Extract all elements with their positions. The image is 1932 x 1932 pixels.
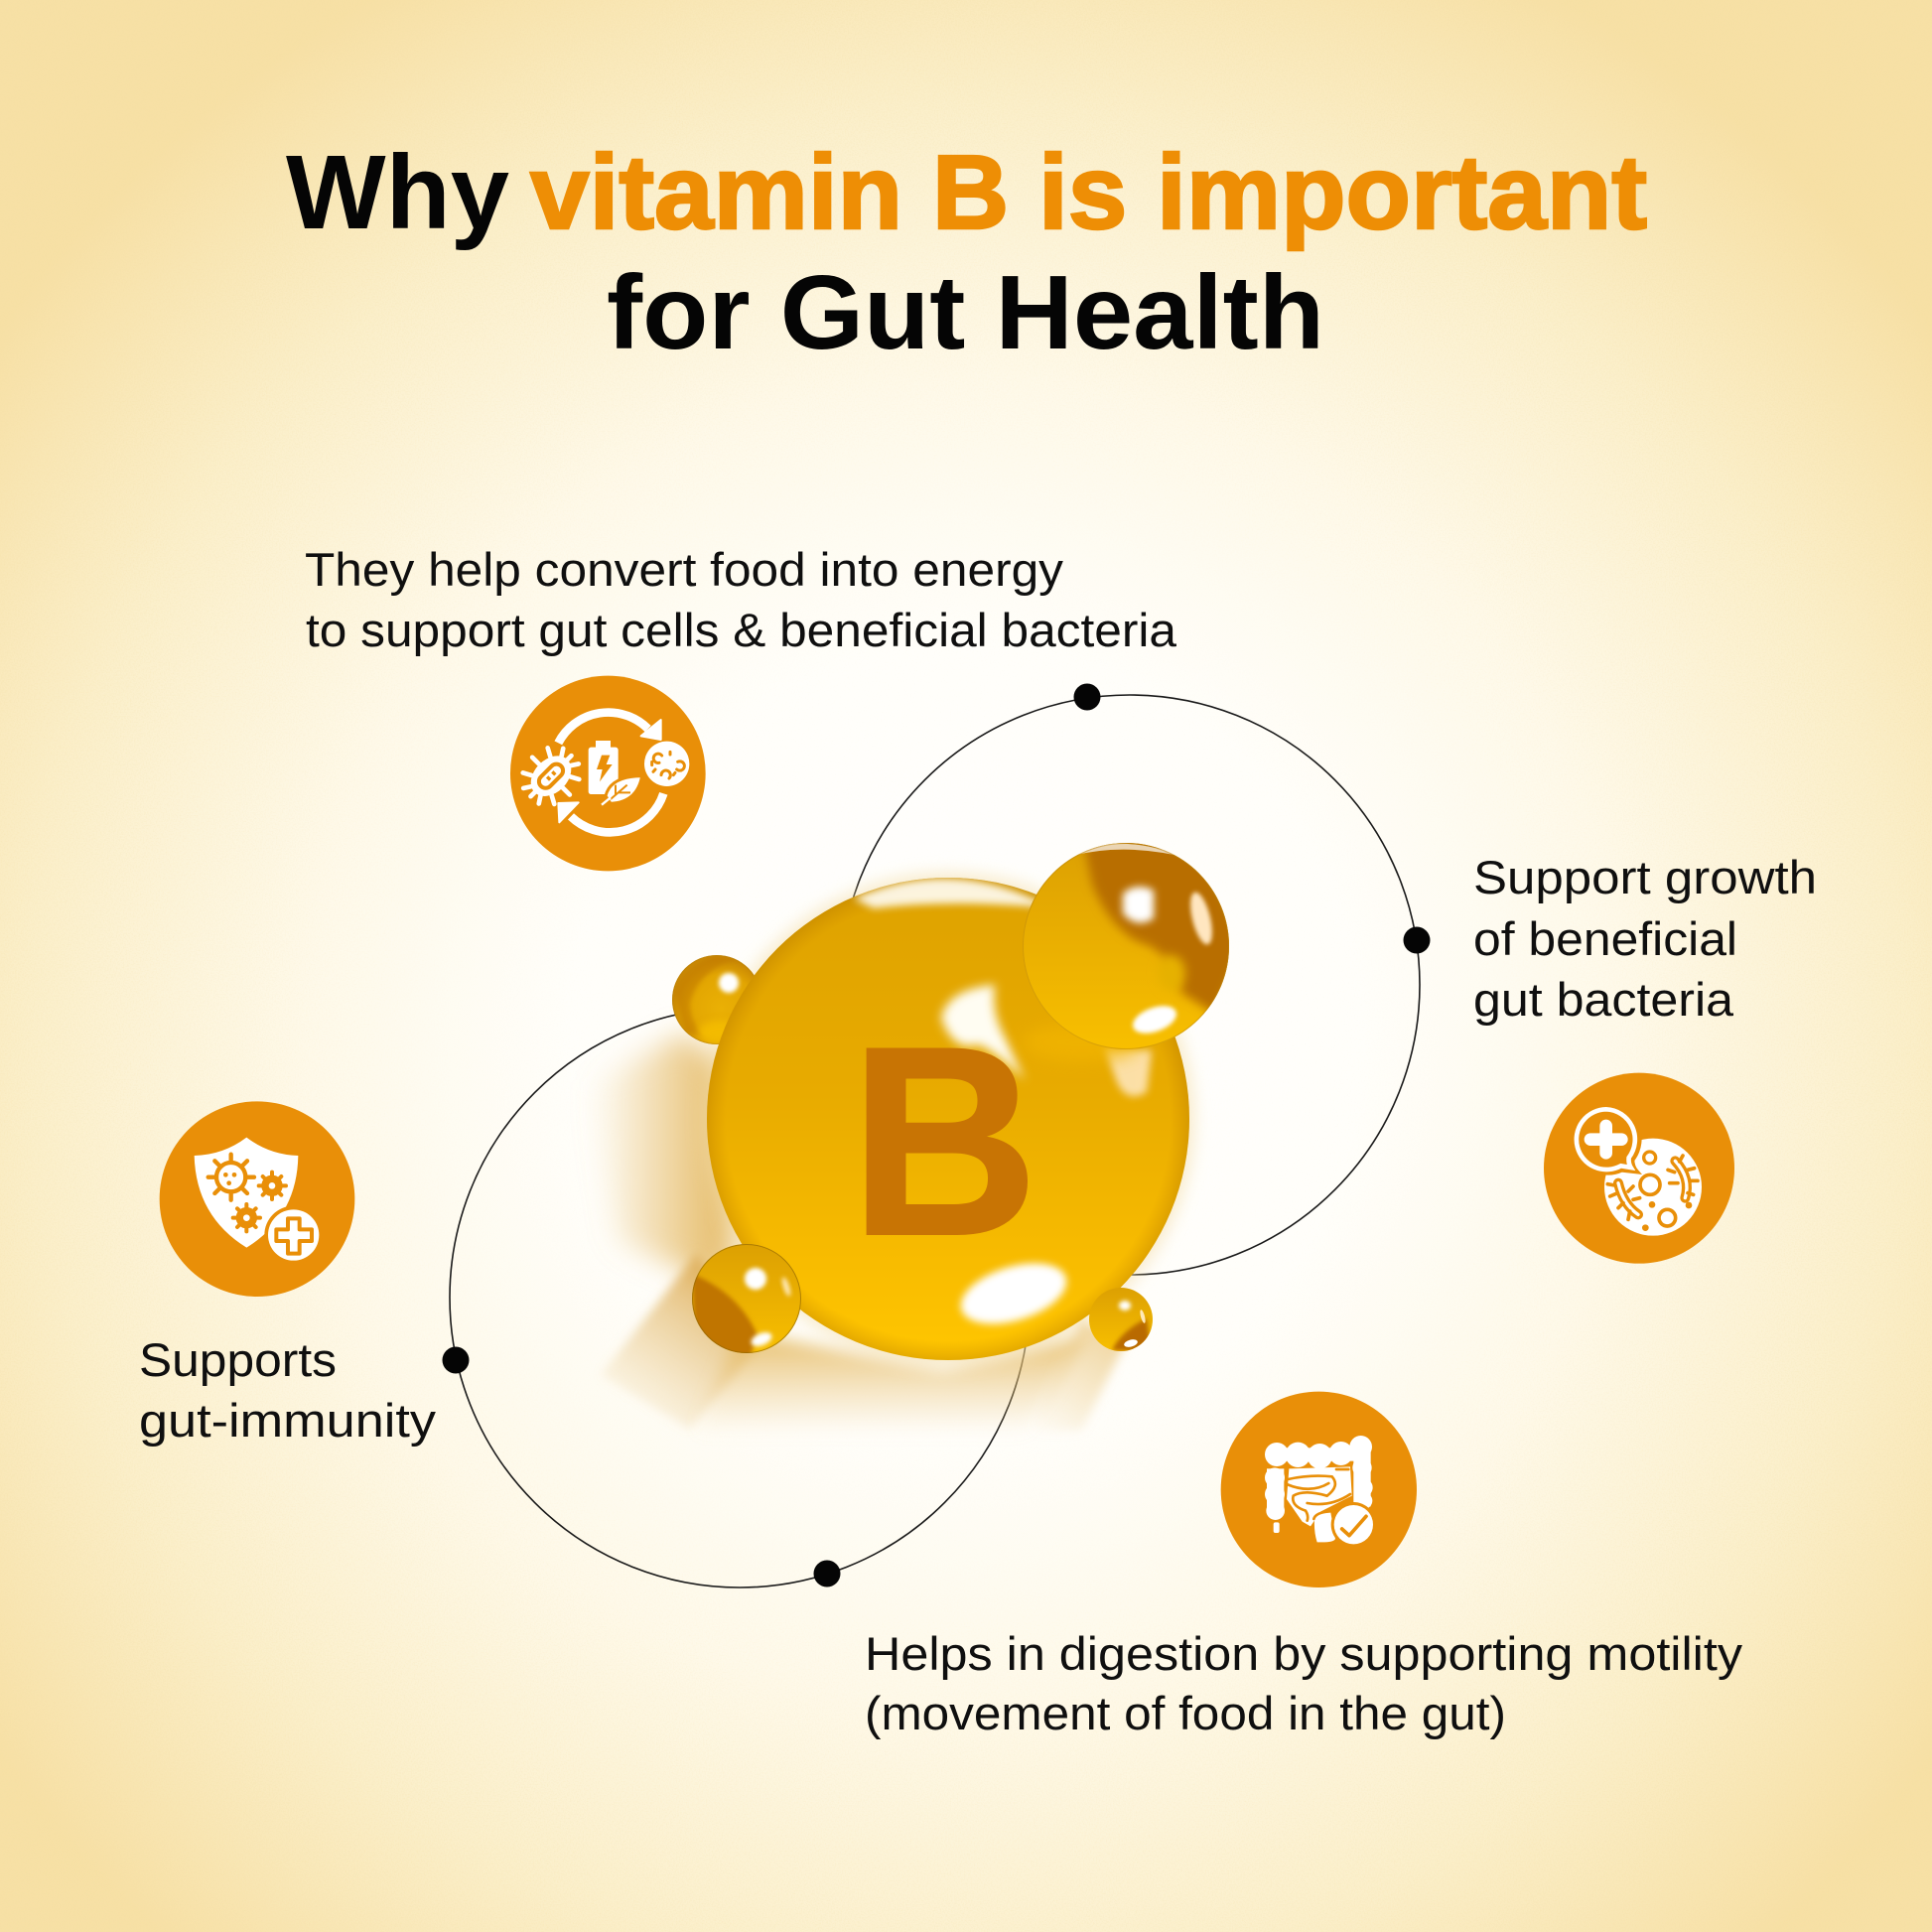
check badge [1331, 1502, 1376, 1547]
text: digestion: Helps in digestion by supporting motility [865, 1627, 1743, 1680]
text: digestion: (movement of food in the gut) [865, 1687, 1506, 1739]
speech bubble with plus [1574, 1105, 1639, 1173]
title [286, 134, 1647, 371]
large intestine [1265, 1436, 1373, 1533]
orbit: upper right ring [840, 695, 1420, 1275]
text: immunity: Supports [139, 1333, 337, 1386]
orbit: lower left ring [450, 1008, 1030, 1587]
germ upper right [259, 1173, 286, 1199]
text: digestion [865, 1627, 1743, 1739]
title: Why [286, 134, 509, 251]
text: growth: Support growth [1473, 851, 1817, 903]
letter B: B [850, 992, 1038, 1292]
germ lower [233, 1204, 260, 1231]
icon: energy cycle [510, 676, 706, 871]
title: for Gut Health [607, 254, 1324, 371]
small intestine [1287, 1466, 1352, 1526]
leaf [602, 776, 642, 805]
text: energy: to support gut cells & beneficial bacteria [306, 604, 1177, 656]
microbes [644, 742, 689, 786]
title: vitamin B is important [530, 134, 1647, 251]
text: growth [1473, 851, 1817, 1026]
large bubble [1023, 843, 1229, 1049]
bottom-left bubble [692, 1244, 801, 1358]
bottom-right bubble [1089, 1288, 1153, 1352]
icon: intestine [1221, 1392, 1417, 1587]
battery and bolt [589, 741, 619, 794]
plus badge [264, 1206, 323, 1264]
vitamin B capsule illustration [588, 829, 1246, 1435]
main droplet [707, 878, 1189, 1360]
virus [208, 1155, 254, 1200]
text: growth: of beneficial [1473, 912, 1737, 965]
text: immunity: gut-immunity [139, 1394, 437, 1447]
text: growth: gut bacteria [1473, 973, 1734, 1026]
icon: immunity shield [160, 1101, 354, 1297]
orbit dots [443, 683, 1430, 1587]
cast shadows [588, 873, 1194, 1435]
text: immunity [139, 1333, 437, 1447]
bacterium [512, 737, 590, 815]
left bubble [672, 955, 761, 1044]
icon: petri dish with bacteria [1544, 1073, 1734, 1264]
text: energy [305, 543, 1177, 656]
text: energy: They help convert food into energy [305, 543, 1064, 596]
